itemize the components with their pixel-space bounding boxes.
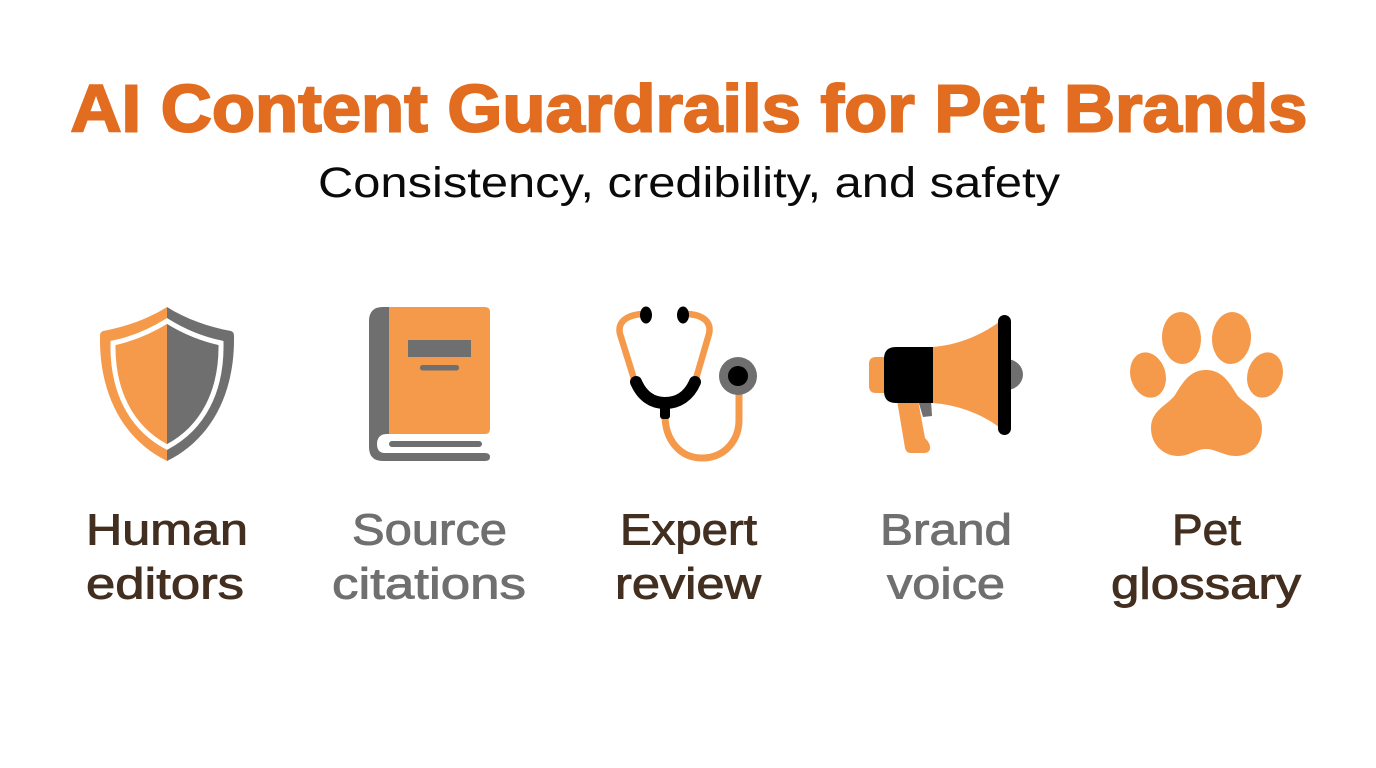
- item: source citations: [332, 307, 526, 608]
- label: human editors: [86, 506, 248, 608]
- label: source citations: [332, 506, 526, 608]
- label: human editors: editors: [86, 560, 244, 608]
- label: pet glossary: Pet: [1172, 506, 1241, 554]
- label: expert review: review: [615, 560, 761, 608]
- label: human editors: Human: [86, 506, 248, 554]
- label: expert review: Expert: [620, 506, 757, 554]
- item: expert review: [615, 306, 761, 608]
- label: brand voice: Brand: [880, 506, 1012, 554]
- icon: paw print: [1125, 311, 1288, 456]
- icon: stethoscope: [620, 306, 757, 458]
- icon: shield: [100, 307, 234, 461]
- label: brand voice: [880, 506, 1012, 608]
- label: brand voice: voice: [887, 560, 1005, 608]
- label: pet glossary: [1111, 506, 1301, 608]
- item: human editors: [86, 307, 248, 608]
- subtitle: Consistency, credibility, and safety: [318, 159, 1061, 207]
- item: brand voice: [869, 315, 1023, 608]
- label: expert review: [615, 506, 761, 608]
- label: source citations: Source: [352, 506, 507, 554]
- title: AI Content Guardrails for Pet Brands: [70, 72, 1308, 146]
- icon: megaphone: [869, 315, 1023, 453]
- label: pet glossary: glossary: [1111, 560, 1301, 608]
- label: source citations: citations: [332, 560, 526, 608]
- item: pet glossary: [1111, 311, 1301, 608]
- icon: book: [369, 307, 490, 461]
